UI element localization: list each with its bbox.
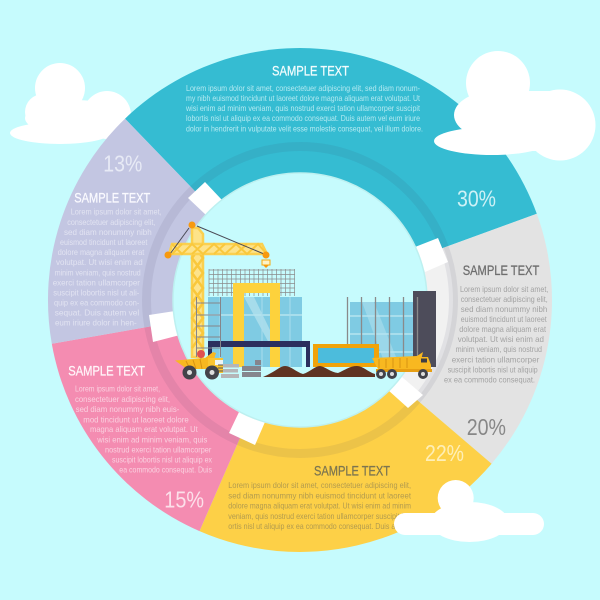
concrete slabs	[221, 364, 239, 378]
body text: consectetuer adipiscing elit,	[75, 394, 170, 404]
body text: Lorem ipsum dolor sit amet,	[71, 207, 162, 217]
body text: Lorem ipsum dolor sit amet,	[460, 284, 548, 294]
text: pink segment	[68, 363, 213, 512]
body text: volutpat. Ut wisi enim ad	[458, 334, 544, 344]
percent: 30%: 30%	[457, 186, 496, 212]
body text: veniam, quis nostrud exerci tation ullamcorper suscipit lob	[228, 511, 411, 521]
yellow arch	[233, 283, 280, 367]
percent: 15%: 15%	[164, 486, 204, 512]
cloud: upper left	[10, 63, 131, 144]
scaffold	[196, 297, 221, 357]
body text: exerci tation ullamcorper	[452, 354, 539, 364]
panel: pink segment	[52, 300, 300, 531]
body text: volutpat. Ut wisi enim ad	[56, 257, 143, 267]
body text: magna aliquam erat volutpat. Ut	[90, 424, 198, 434]
body text: minim veniam, quis nostrud	[456, 344, 542, 354]
heading: SAMPLE TEXT	[463, 262, 540, 278]
body text: exerci tation ullamcorper	[53, 277, 140, 287]
body text: consectetuer adipiscing elit,	[461, 294, 548, 304]
tabs: white separators	[149, 182, 448, 445]
body text	[75, 384, 213, 474]
dump truck left	[175, 352, 223, 380]
percent: 13%: 13%	[103, 150, 142, 176]
bricks	[242, 360, 261, 377]
orange container	[313, 344, 379, 367]
panel: teal segment	[125, 48, 537, 300]
steel posts	[348, 297, 418, 367]
heading: SAMPLE TEXT	[74, 190, 151, 206]
body text: dolore magna aliquam erat	[459, 324, 547, 334]
body text: sed diam nonummy nibh euismod tincidunt ut laoreet	[228, 490, 412, 500]
body text: sequat. Duis autem vel	[55, 308, 139, 318]
percent: 22%: 22%	[425, 440, 464, 466]
percent: 20%: 20%	[467, 414, 506, 440]
body text: suscipit lobortis nisl ut aliquip	[448, 364, 538, 374]
panel: yellow segment	[200, 300, 492, 552]
text: lavender segment	[53, 150, 162, 328]
body text: lobortis nisl ut aliquip ex ea commodo consequat. Duis autem vel eum iriure	[186, 113, 420, 123]
panel: grey segment	[300, 214, 552, 464]
glass building right	[350, 302, 413, 367]
body text: ea commodo consequat. Duis	[119, 464, 212, 474]
text: yellow segment	[228, 440, 464, 531]
crane	[164, 222, 270, 357]
heading: SAMPLE TEXT	[272, 62, 349, 78]
cloud: upper right	[434, 51, 596, 160]
heading: SAMPLE TEXT	[314, 463, 390, 479]
dump truck right	[372, 352, 432, 379]
body text: wisi enim ad minim veniam, quis nostrud exerci tation ullamcorper suscipit	[185, 103, 421, 113]
body text: dolor in hendrerit in vulputate velit esse molestie consequat, vel illum dolore.	[186, 124, 423, 134]
stop sign	[197, 350, 205, 366]
lighter inner zone of grey segment	[300, 248, 453, 399]
navy beam	[208, 341, 310, 367]
text: grey segment	[444, 262, 548, 440]
dark tower	[413, 291, 436, 367]
panel: lavender segment	[48, 119, 300, 344]
body text: sed diam nonummy nibh euis-	[76, 404, 179, 414]
circular ring diagram	[48, 48, 552, 552]
body text: sed diam nonummy nibh	[64, 227, 152, 237]
illustration: construction site	[164, 222, 436, 380]
body text: mod tincidunt ut laoreet dolore	[83, 414, 189, 424]
body text: eum iriure dolor in hen-	[55, 318, 137, 328]
body text: dolore magna aliquam erat	[58, 247, 145, 257]
body text: quip ex ea commodo con-	[54, 298, 139, 308]
body text	[444, 284, 548, 384]
dirt piles	[263, 366, 375, 377]
cloud: bottom right	[394, 480, 544, 542]
heading: SAMPLE TEXT	[68, 363, 145, 379]
body text: euismod tincidunt ut laoreet	[60, 237, 148, 247]
center disc	[173, 173, 427, 427]
body text: Lorem ipsum dolor sit amet,	[75, 384, 160, 394]
body text: ortis nisl ut aliquip ex ea commodo consequat. Duis autem	[228, 521, 411, 531]
text: teal segment	[185, 62, 423, 134]
body text	[185, 83, 423, 134]
body text	[228, 480, 412, 531]
body text: suscipit lobortis nisl ut aliquip ex	[112, 454, 213, 464]
body text: my nibh euismod tincidunt ut laoreet dolore magna aliquam erat volutpat. Ut	[186, 93, 421, 103]
body text: euismod tincidunt ut laoreet	[461, 314, 547, 324]
body text: suscipit lobortis nisl ut ali-	[53, 287, 139, 297]
body text: nostrud exerci tation ullamcorper	[105, 444, 211, 454]
body text: Lorem ipsum dolor sit amet, consectetuer adipiscing elit, sed diam nonum-	[186, 83, 420, 93]
body text: Lorem ipsum dolor sit amet, consectetuer adipiscing elit,	[228, 480, 411, 490]
body text: consectetuer adipiscing elit,	[67, 217, 155, 227]
body text: sed diam nonummy nibh	[461, 304, 548, 314]
body text: minim veniam, quis nostrud	[55, 267, 141, 277]
body text	[53, 207, 162, 328]
body text: wisi enim ad minim veniam, quis	[96, 434, 207, 444]
body text: dolore magna aliquam erat volutpat. Ut wisi enim ad minim	[228, 501, 411, 511]
grid mesh	[209, 269, 295, 296]
body text: ex ea commodo consequat.	[444, 374, 535, 384]
glass building left	[208, 297, 302, 367]
